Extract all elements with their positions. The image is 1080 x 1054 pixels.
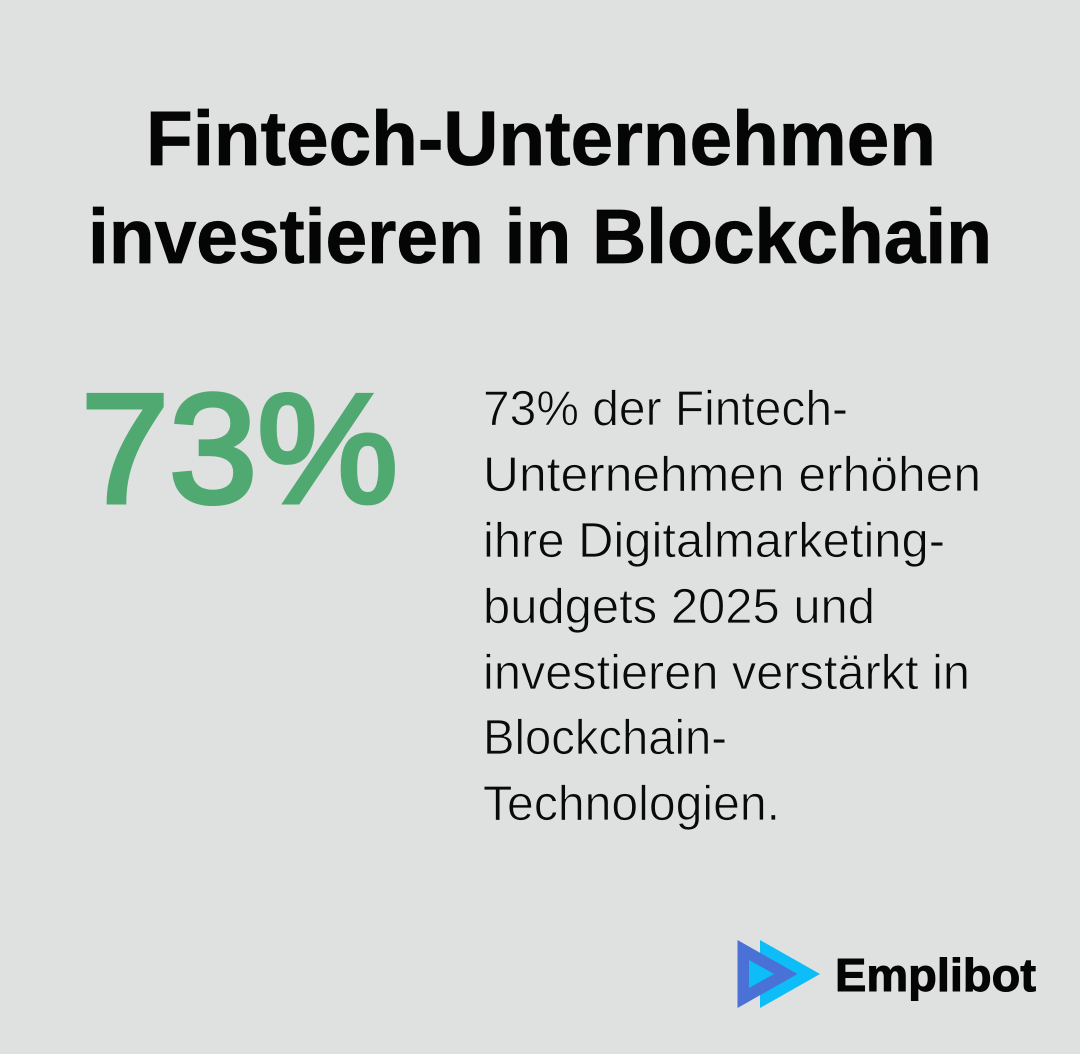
description text block: Technologien.: [483, 777, 780, 831]
description text block: investieren verstärkt in: [483, 646, 970, 700]
big statistic: 73%: 73%: [81, 362, 398, 535]
description text block: Blockchain-: [483, 711, 727, 765]
title: investieren in Blockchain: [88, 194, 992, 280]
title: Fintech-Unternehmen: [146, 96, 936, 182]
description text block: budgets 2025 und: [483, 580, 875, 634]
description text block: ihre Digitalmarketing-: [483, 514, 945, 568]
description text block: [483, 382, 981, 831]
description text block: Unternehmen erhöhen: [483, 448, 981, 502]
title: [88, 96, 992, 280]
description text block: 73% der Fintech-: [483, 382, 848, 436]
logo: Emplibot: [738, 940, 1036, 1008]
icon: play triangles: [738, 940, 820, 1008]
logo wordmark: Emplibot: [835, 949, 1036, 1001]
